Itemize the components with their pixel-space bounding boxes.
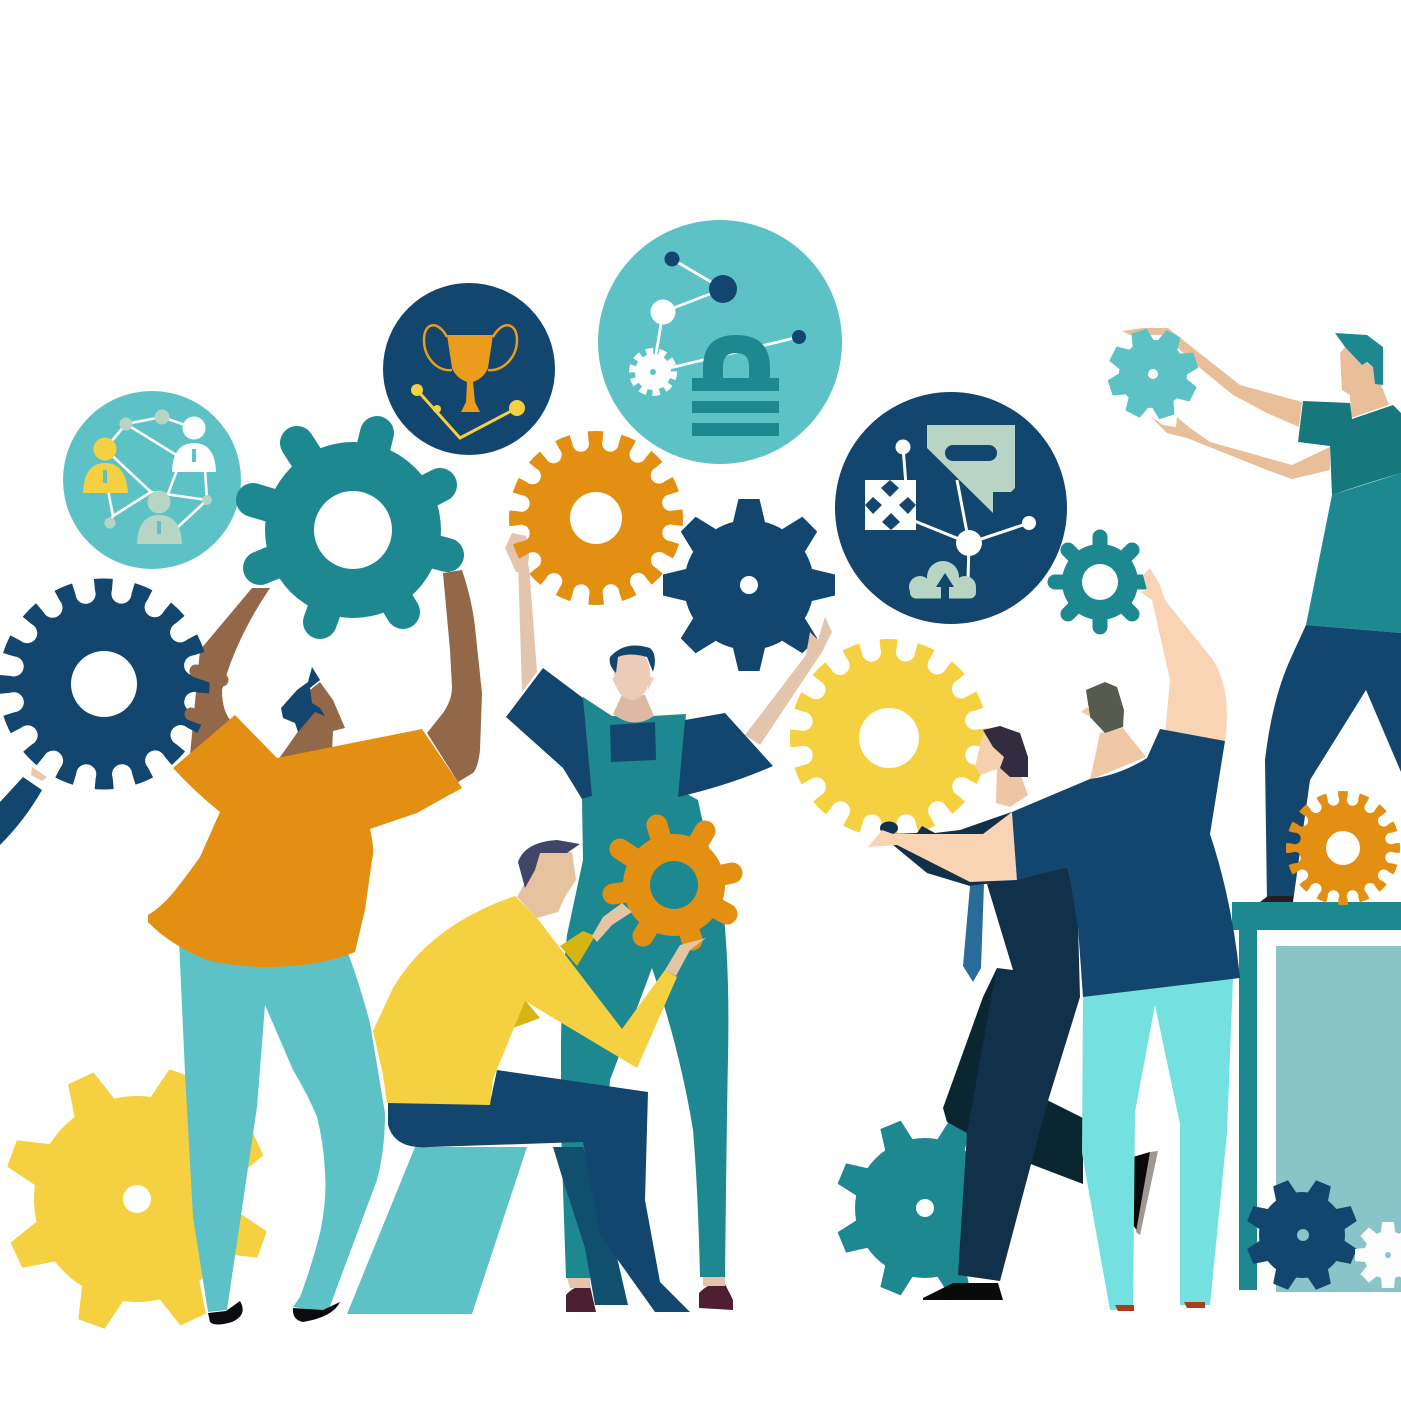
gear: teal top right	[1107, 328, 1199, 420]
person: seated man in yellow	[347, 840, 706, 1314]
far hand	[592, 903, 632, 942]
near arm	[868, 812, 1017, 882]
person: standing man in overalls	[506, 645, 773, 1312]
gear: orange top middle	[517, 439, 675, 597]
gear: small teal	[1055, 537, 1145, 627]
shoes	[566, 1283, 733, 1312]
head	[1086, 682, 1124, 733]
gear: large yellow bottom left	[4, 1066, 270, 1332]
person: man on the box, arms	[1122, 328, 1330, 479]
hair	[610, 645, 655, 673]
navy shirt	[1012, 729, 1240, 997]
raised shoe	[1133, 1152, 1150, 1235]
face and neck	[1340, 347, 1389, 418]
panel: teal box	[1232, 902, 1401, 1292]
hair	[518, 840, 580, 888]
tie	[963, 884, 984, 982]
fist	[880, 822, 898, 834]
hair	[1335, 333, 1383, 385]
neck	[613, 695, 654, 723]
lower shirt	[1306, 473, 1401, 633]
gear: large navy left	[9, 589, 199, 779]
gear: orange held by seated man	[613, 825, 732, 940]
shoes	[208, 1301, 340, 1324]
trousers	[179, 940, 385, 1312]
neck and face	[517, 852, 576, 918]
head	[278, 682, 345, 760]
far arm	[560, 931, 595, 966]
right sleeve	[678, 713, 773, 797]
person: man in dark suit	[880, 726, 1158, 1300]
sleeve	[893, 812, 1017, 886]
hair	[983, 726, 1028, 777]
gear: yellow right of centre	[799, 648, 979, 828]
overalls	[561, 697, 728, 1278]
gear: teal bottom centre right	[836, 1119, 1014, 1297]
ear	[1081, 706, 1089, 716]
face	[975, 733, 1004, 775]
orange shirt	[148, 715, 462, 967]
icon circle: people network	[63, 391, 241, 569]
arm: person off the left edge	[0, 767, 47, 845]
bib	[610, 722, 656, 762]
shoe	[923, 1283, 1003, 1300]
gear: teal with round lobes	[253, 433, 447, 622]
raised arm	[1140, 568, 1227, 741]
head	[614, 648, 650, 700]
jacket and legs	[958, 867, 1080, 1281]
icon circle: communication network	[835, 392, 1067, 624]
neck	[1090, 728, 1146, 780]
person: man on the box	[1260, 333, 1401, 902]
back leg	[943, 968, 1083, 1184]
arm raised left, middle man	[505, 533, 537, 692]
gear: navy in the box	[1246, 1179, 1358, 1291]
shoe	[1260, 896, 1293, 902]
ears	[612, 676, 654, 690]
person: man in orange shirt	[148, 667, 462, 1324]
icon circle: security lock	[598, 220, 842, 464]
gear: white in the box	[1355, 1222, 1401, 1288]
fingers gripping navy gear	[191, 671, 222, 724]
arm raised right, middle man	[745, 617, 832, 745]
neck	[996, 765, 1028, 807]
near hand	[665, 938, 706, 976]
shoes	[1115, 1302, 1205, 1311]
ankles	[567, 1276, 725, 1288]
person: man in navy shirt	[868, 568, 1240, 1311]
far leg	[553, 1147, 628, 1305]
stool	[347, 1147, 527, 1314]
trousers	[1082, 978, 1233, 1310]
hair	[281, 667, 325, 732]
person: man in orange shirt, arms	[190, 570, 482, 782]
left sleeve	[506, 668, 592, 799]
gear: orange on the box	[1292, 796, 1394, 900]
shoe sole	[1136, 1151, 1158, 1235]
icon circle: trophy	[383, 283, 555, 455]
trousers	[388, 1070, 690, 1312]
trousers	[1265, 625, 1401, 902]
yellow shirt	[373, 896, 677, 1105]
gear: navy with square teeth	[663, 499, 835, 671]
belly shade	[513, 1000, 540, 1028]
sleeve and chest	[1298, 401, 1401, 495]
